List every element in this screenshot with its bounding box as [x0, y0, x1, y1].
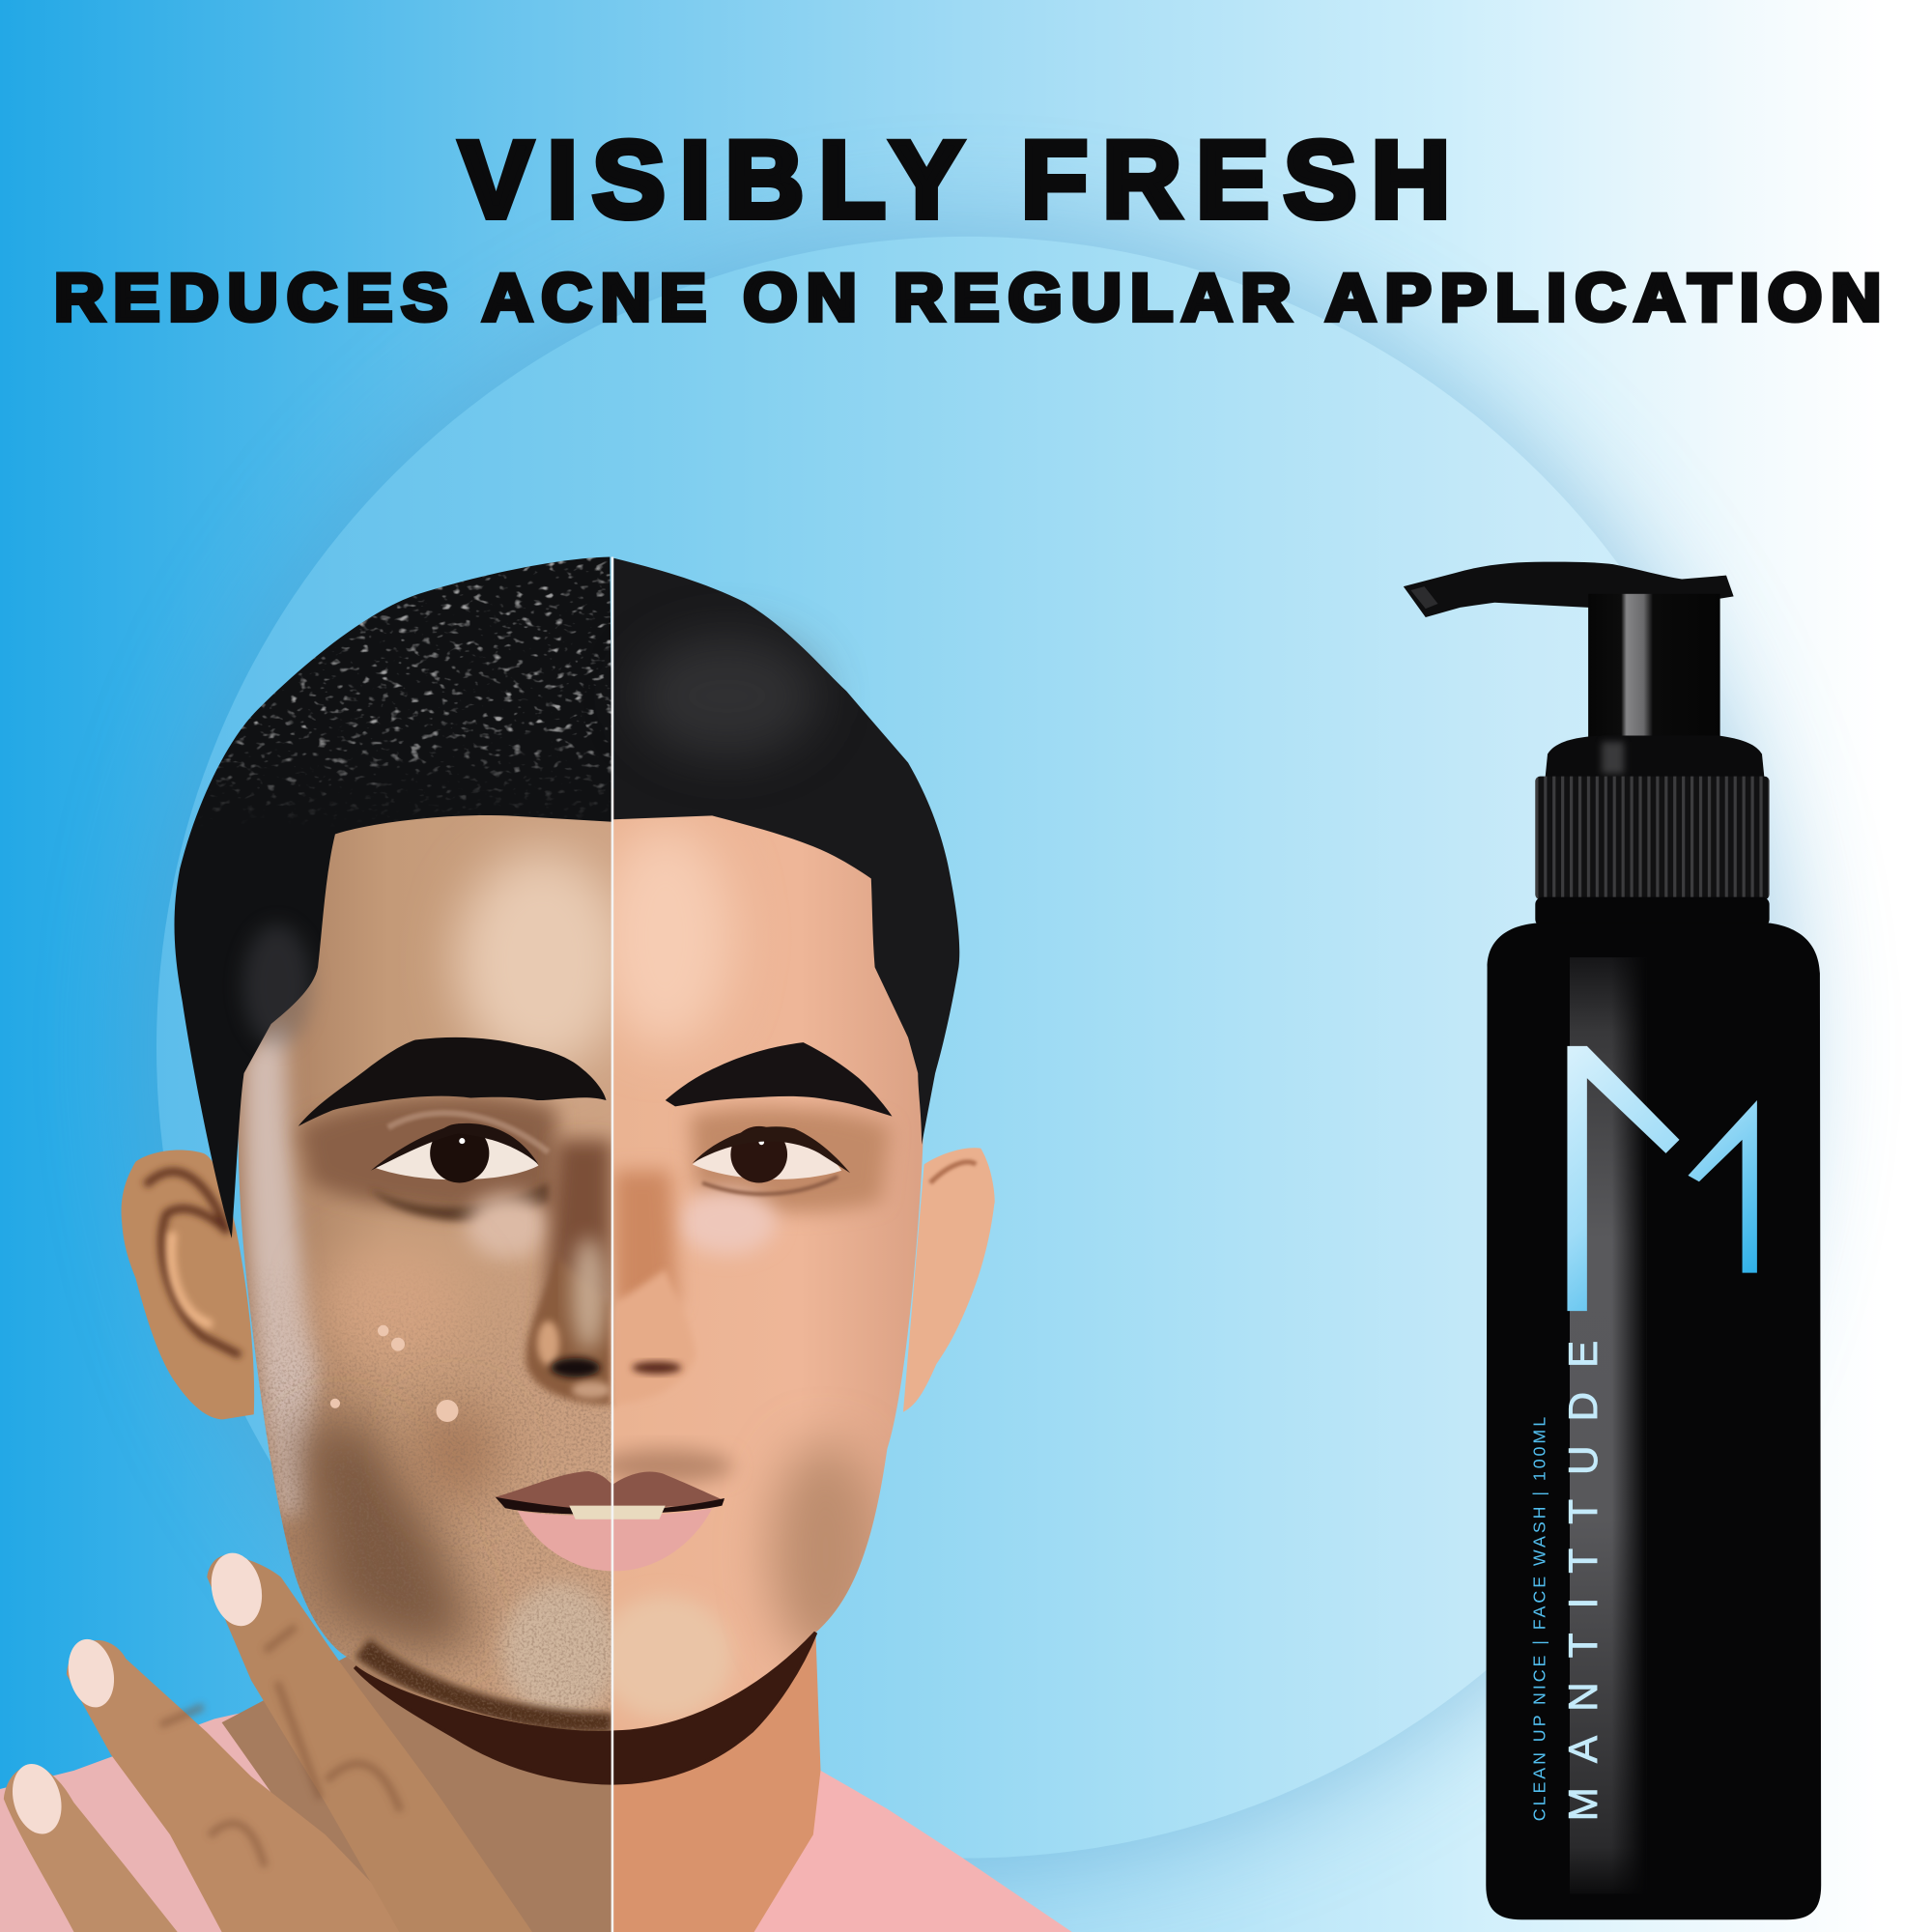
- neck: [222, 1633, 820, 1932]
- beard stubble: [251, 1288, 611, 1731]
- pump head: [1404, 562, 1734, 739]
- right ear: [903, 1148, 995, 1412]
- bottle body: [1486, 923, 1821, 1919]
- middle finger: [67, 1640, 419, 1932]
- right shading: [598, 826, 890, 1719]
- divider line: [611, 557, 613, 1932]
- brand name: MANTITTUDE: [1560, 1341, 1605, 1821]
- product bottle: [1404, 562, 1821, 1919]
- left half of face: [238, 815, 611, 1731]
- temple fade: [242, 924, 312, 1047]
- product description: CLEAN UP NICE | FACE WASH | 100ML: [1529, 1417, 1548, 1821]
- left ear: [122, 1151, 254, 1419]
- chin shadow: [355, 1633, 815, 1783]
- ring finger: [4, 1766, 178, 1932]
- shirt: [0, 1709, 1072, 1932]
- highlight fade: [1570, 957, 1646, 1893]
- mouth: [496, 1471, 724, 1571]
- index finger: [207, 1555, 532, 1932]
- heading: visibly fresh: VISIBLY FRESH: [460, 118, 1465, 240]
- ribbed cap: [1535, 777, 1770, 899]
- subheading: REDUCES ACNE ON REGULAR APPLICATION: [54, 261, 1890, 335]
- ears: [122, 1148, 995, 1419]
- background circle: [156, 237, 1778, 1858]
- finger creases: [160, 1627, 401, 1866]
- title: [54, 118, 1890, 335]
- right half of face: [613, 788, 923, 1731]
- bottle highlight band: [1570, 957, 1646, 1893]
- left eye: [371, 1113, 549, 1182]
- face skin: [239, 788, 924, 1783]
- hair shine: [211, 557, 611, 818]
- collar gloss: [1602, 742, 1624, 774]
- before and after portrait: [0, 557, 1072, 1932]
- skin shading: [241, 826, 890, 1737]
- hair: [173, 557, 959, 1238]
- hand: [4, 1548, 532, 1932]
- collar: [1545, 735, 1765, 779]
- nose: [526, 1237, 696, 1405]
- right eyebrow: [666, 1042, 892, 1117]
- logo M: [1567, 1046, 1757, 1311]
- left eyebrow: [298, 1037, 607, 1126]
- bottle neck ring: [1535, 897, 1770, 926]
- right hair sheen: [635, 635, 819, 757]
- acne spots: [330, 1325, 458, 1422]
- fingernails: [5, 1548, 269, 1839]
- background circle shadow: [154, 234, 1780, 1861]
- left shading: [241, 850, 629, 1737]
- right eye: [693, 1126, 850, 1194]
